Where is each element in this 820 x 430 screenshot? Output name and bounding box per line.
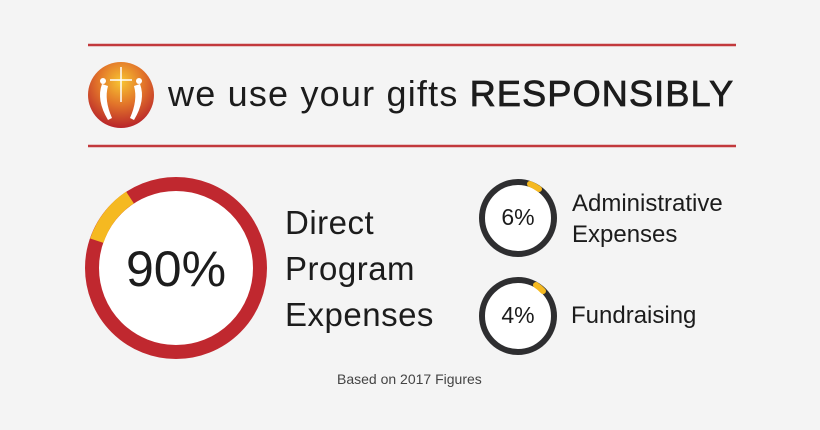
chart: donut 6% bbox=[482, 182, 554, 254]
label: direct program bbox=[285, 204, 434, 333]
label: direct program: Direct bbox=[285, 204, 374, 241]
label admin: Administrative bbox=[572, 190, 723, 217]
small percent 4: 4% bbox=[501, 302, 535, 328]
label: direct program: Program bbox=[285, 250, 415, 287]
small percent 6: 6% bbox=[501, 204, 535, 230]
label admin bbox=[572, 190, 723, 248]
icon: logo bbox=[88, 62, 154, 128]
chart: donut 4% bbox=[482, 280, 554, 352]
title: we use your gifts RESPONSIBLY bbox=[168, 73, 734, 114]
big percent: 90% bbox=[126, 241, 226, 297]
label: direct program: Expenses bbox=[285, 296, 434, 333]
label admin: Expenses bbox=[572, 221, 677, 248]
footnote: Based on 2017 Figures bbox=[337, 371, 482, 387]
label fundraising: Fundraising bbox=[571, 302, 696, 329]
chart: big donut 90% bbox=[92, 184, 260, 352]
